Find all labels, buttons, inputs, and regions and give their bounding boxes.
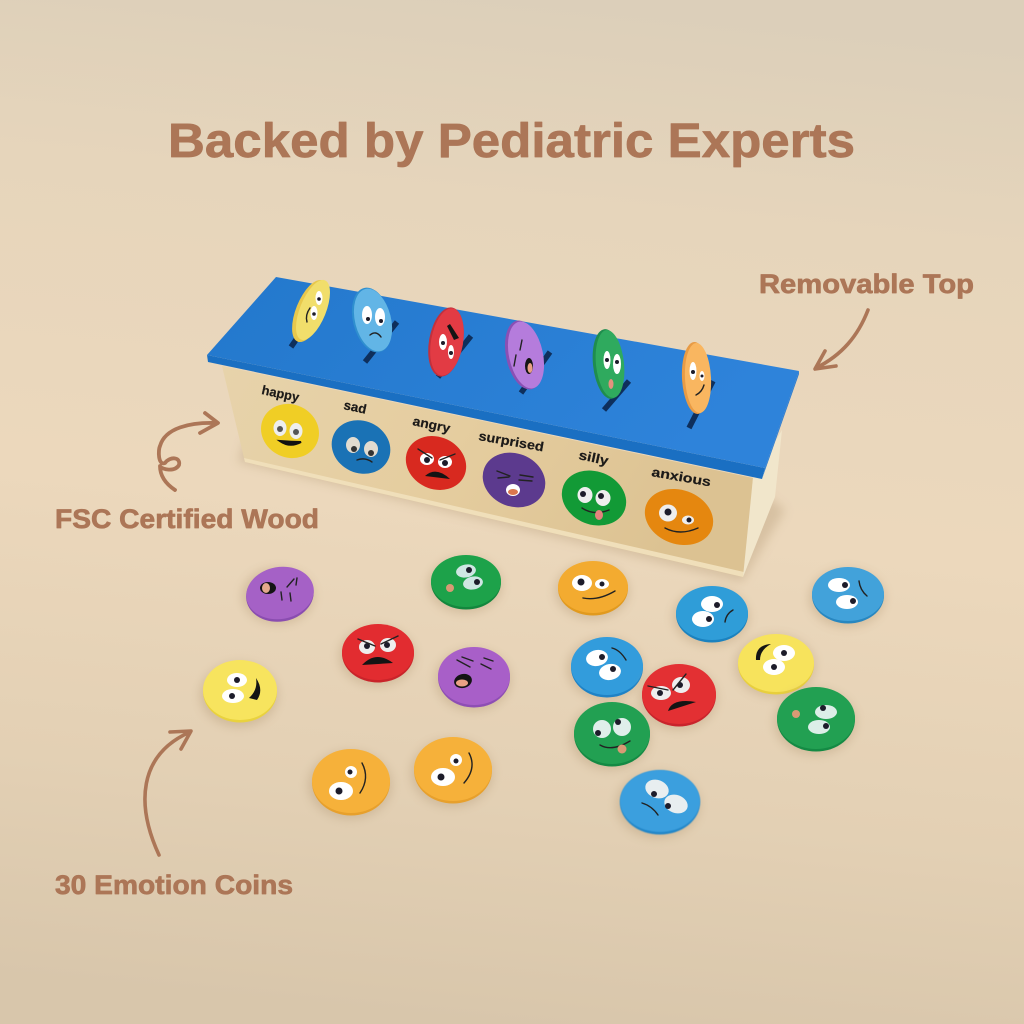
coin: orange 2 (411, 737, 493, 807)
printed face: angry (397, 426, 475, 500)
coin: yellow happy 1 (735, 634, 815, 697)
label: 30 Emotion Coins: 30 Emotion Coins (55, 870, 293, 900)
coin: orange 1 (308, 749, 392, 819)
coin: red angry 2 (639, 664, 717, 730)
standing coin: surprised purple (499, 317, 550, 393)
label: FSC Certified Wood: FSC Certified Wood (55, 504, 319, 534)
emotion label: happy: happy (260, 382, 301, 405)
coin: orange anxious (555, 561, 629, 619)
box shadow (238, 440, 785, 582)
coin: blue sad 1 (673, 586, 749, 646)
blue lid (207, 277, 799, 479)
callout: 30 Emotion Coins (55, 731, 293, 900)
slots in lid (291, 322, 713, 428)
box side panel (743, 430, 782, 577)
callout: Removable Top (759, 269, 974, 369)
emotion label: anxious: anxious (650, 464, 712, 489)
coins on table (200, 555, 885, 838)
standing coin: happy yellow (285, 275, 337, 347)
standing coin: sad blue (346, 283, 398, 357)
coin: green silly (428, 555, 502, 613)
coin: green silly 2 (774, 687, 856, 755)
coin: blue sad 4 (616, 770, 700, 838)
printed face: happy (252, 395, 328, 467)
title: Backed by Pediatric Experts (168, 115, 855, 168)
standing coin: silly green (589, 328, 627, 400)
emotion label: silly: silly (577, 447, 611, 468)
coin: purple winking (242, 561, 318, 627)
coin: green silly 3 (570, 702, 650, 770)
emotion label: surprised: surprised (477, 428, 545, 454)
coin: red angry 1 (339, 624, 415, 686)
label: Removable Top: Removable Top (759, 269, 974, 299)
arrow to lid (815, 310, 868, 369)
printed face: anxious (637, 480, 721, 554)
arrow to coins (145, 731, 191, 855)
printed face: surprised (474, 443, 554, 517)
standing coin: anxious orange (680, 341, 713, 415)
emotion label: angry: angry (411, 413, 452, 436)
box bottom edge (244, 458, 744, 577)
coin: yellow happy 2 (200, 660, 278, 727)
printed face: silly (553, 461, 635, 535)
coin: purple surprised (435, 647, 511, 711)
printed face: sad (323, 411, 399, 483)
coin: blue sad 2 (809, 567, 885, 627)
arrow to wood box (159, 413, 218, 490)
box front panel (222, 366, 753, 577)
wooden sorting box (207, 275, 799, 582)
coin: blue sad 3 (567, 637, 643, 700)
standing coin: angry red (423, 305, 469, 379)
emotion label: sad: sad (342, 397, 368, 417)
callout: FSC Certified Wood (55, 413, 319, 534)
